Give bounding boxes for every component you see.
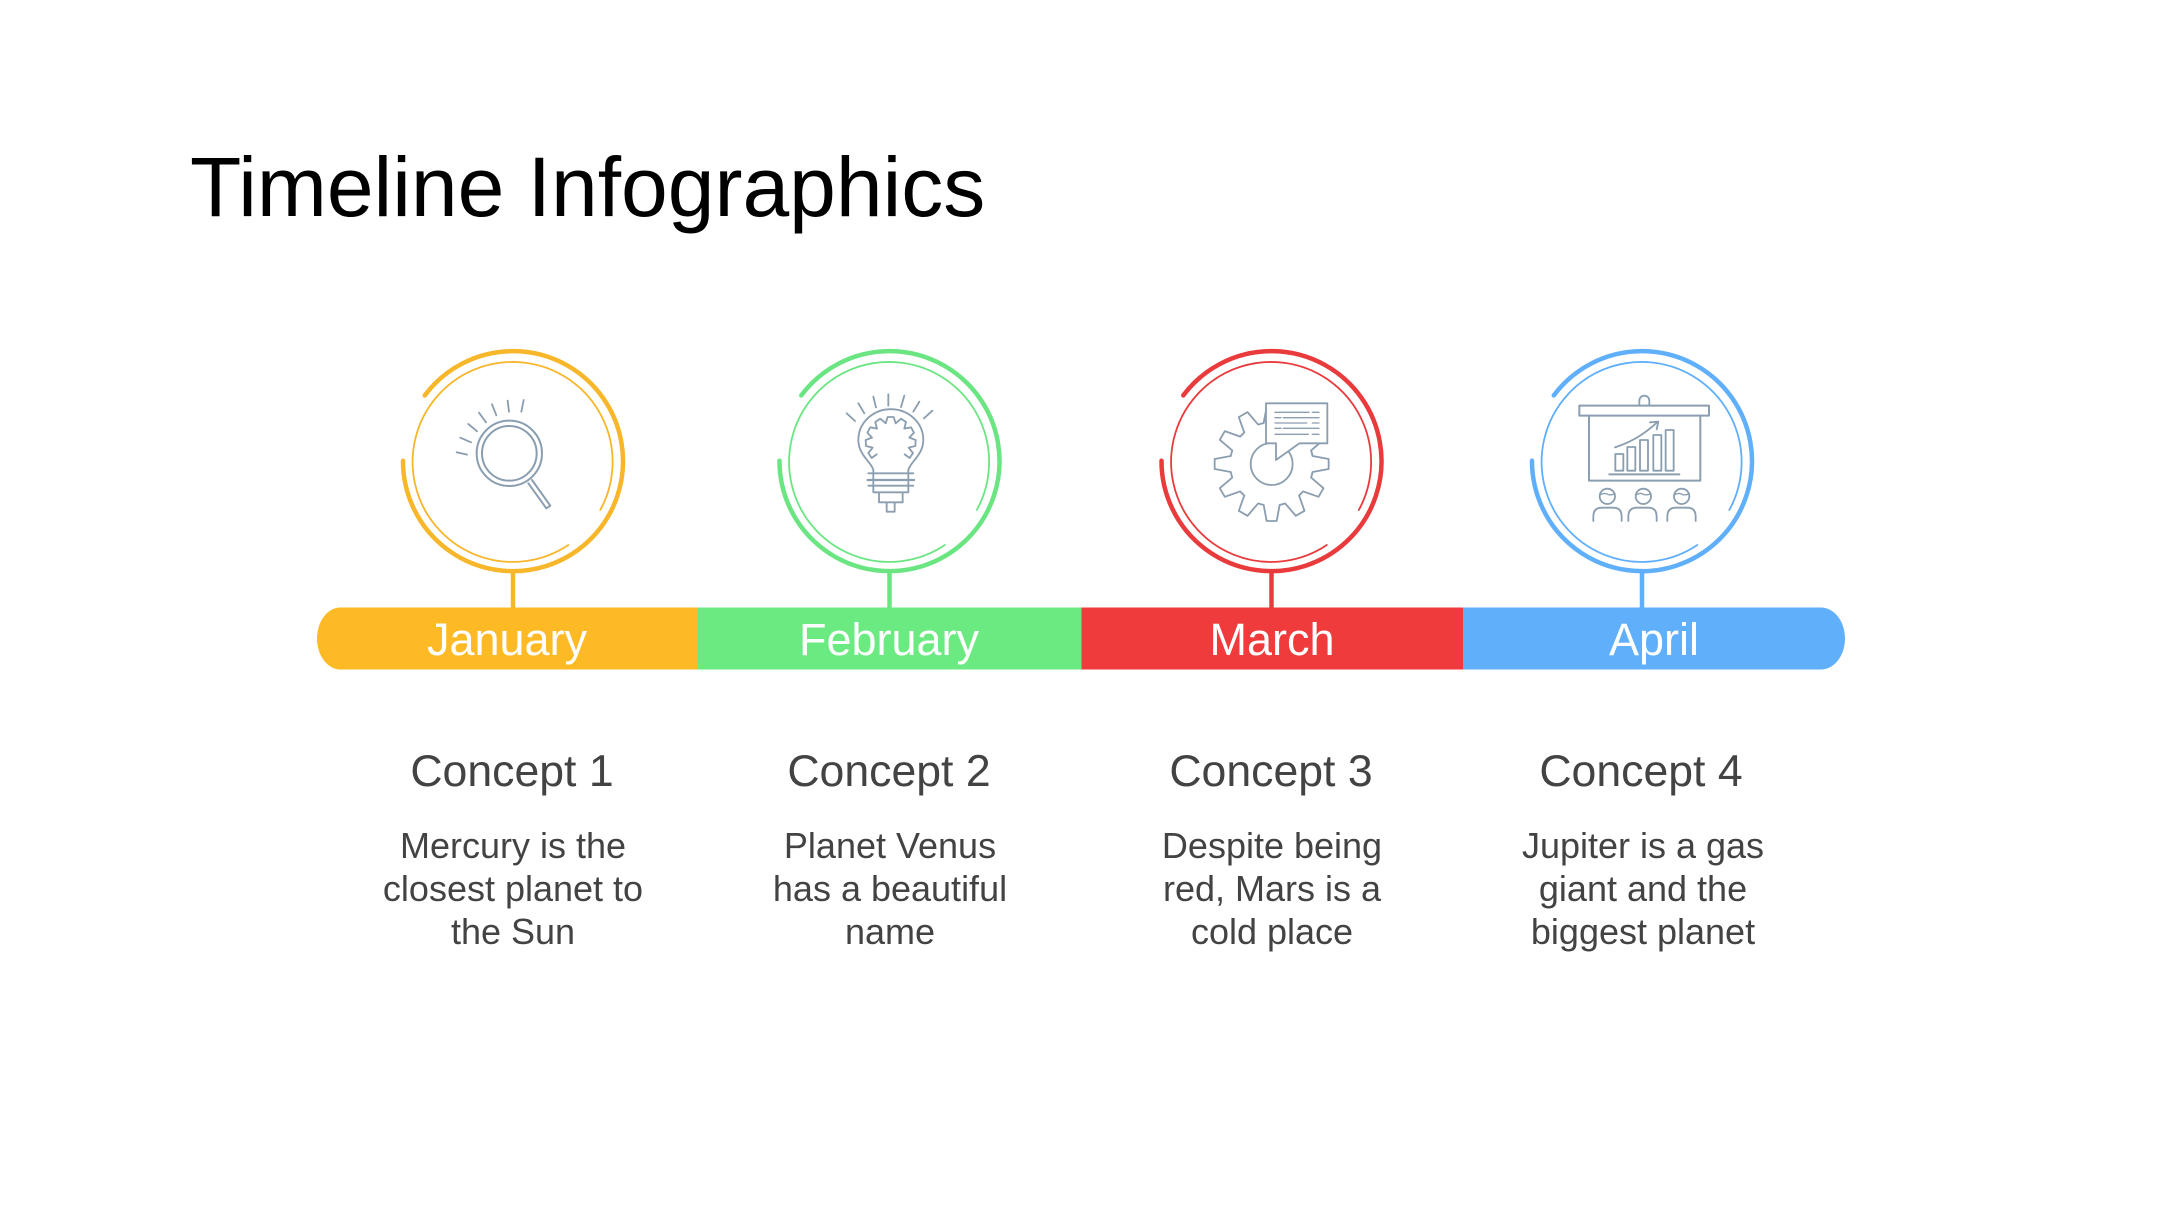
segment: January: [317, 607, 698, 670]
text block: Concept 2: has a beautiful: [773, 868, 1007, 909]
title: Timeline Infographics: [190, 140, 985, 234]
text block: Concept 2: Planet Venus: [784, 825, 996, 866]
text block: Concept 4: giant and the: [1539, 868, 1747, 909]
segment: April: [1463, 608, 1845, 670]
text block: Concept 3: Concept 3: [1169, 747, 1373, 796]
milestone: March rings: [1161, 351, 1381, 608]
text block: Concept 3: cold place: [1191, 911, 1353, 952]
icon: gear with speech bubble: [1215, 403, 1329, 521]
text block: Concept 3: red, Mars is a: [1163, 868, 1382, 909]
label: March: March: [1209, 614, 1335, 665]
text block: Concept 4: biggest planet: [1531, 911, 1755, 952]
icon: presentation board with audience: [1579, 396, 1709, 521]
text block: Concept 4: [1522, 747, 1764, 952]
text block: Concept 1: [383, 747, 643, 952]
label: February: February: [799, 614, 980, 665]
timeline bar: [317, 607, 1845, 670]
label: January: January: [427, 614, 588, 665]
icon: magnifying glass: [457, 400, 550, 508]
milestone: April rings: [1532, 351, 1752, 608]
text block: Concept 4: Jupiter is a gas: [1522, 825, 1764, 866]
text block: Concept 2: [773, 747, 1007, 952]
segment: March: [1082, 608, 1463, 670]
text block: Concept 1: Mercury is the: [400, 825, 626, 866]
text block: Concept 1: the Sun: [451, 911, 575, 952]
text block: Concept 2: name: [845, 911, 935, 952]
text block: Concept 1: Concept 1: [410, 747, 614, 796]
milestone: January rings: [403, 351, 623, 608]
text block: Concept 3: [1162, 747, 1382, 952]
text block: Concept 4: Concept 4: [1539, 747, 1743, 796]
segment: February: [698, 608, 1082, 670]
text block: Concept 2: Concept 2: [787, 747, 991, 796]
text block: Concept 3: Despite being: [1162, 825, 1382, 866]
text block: Concept 1: closest planet to: [383, 868, 643, 909]
label: April: April: [1609, 614, 1699, 665]
icon: light bulb: [847, 394, 932, 512]
milestone: February rings: [779, 351, 999, 608]
